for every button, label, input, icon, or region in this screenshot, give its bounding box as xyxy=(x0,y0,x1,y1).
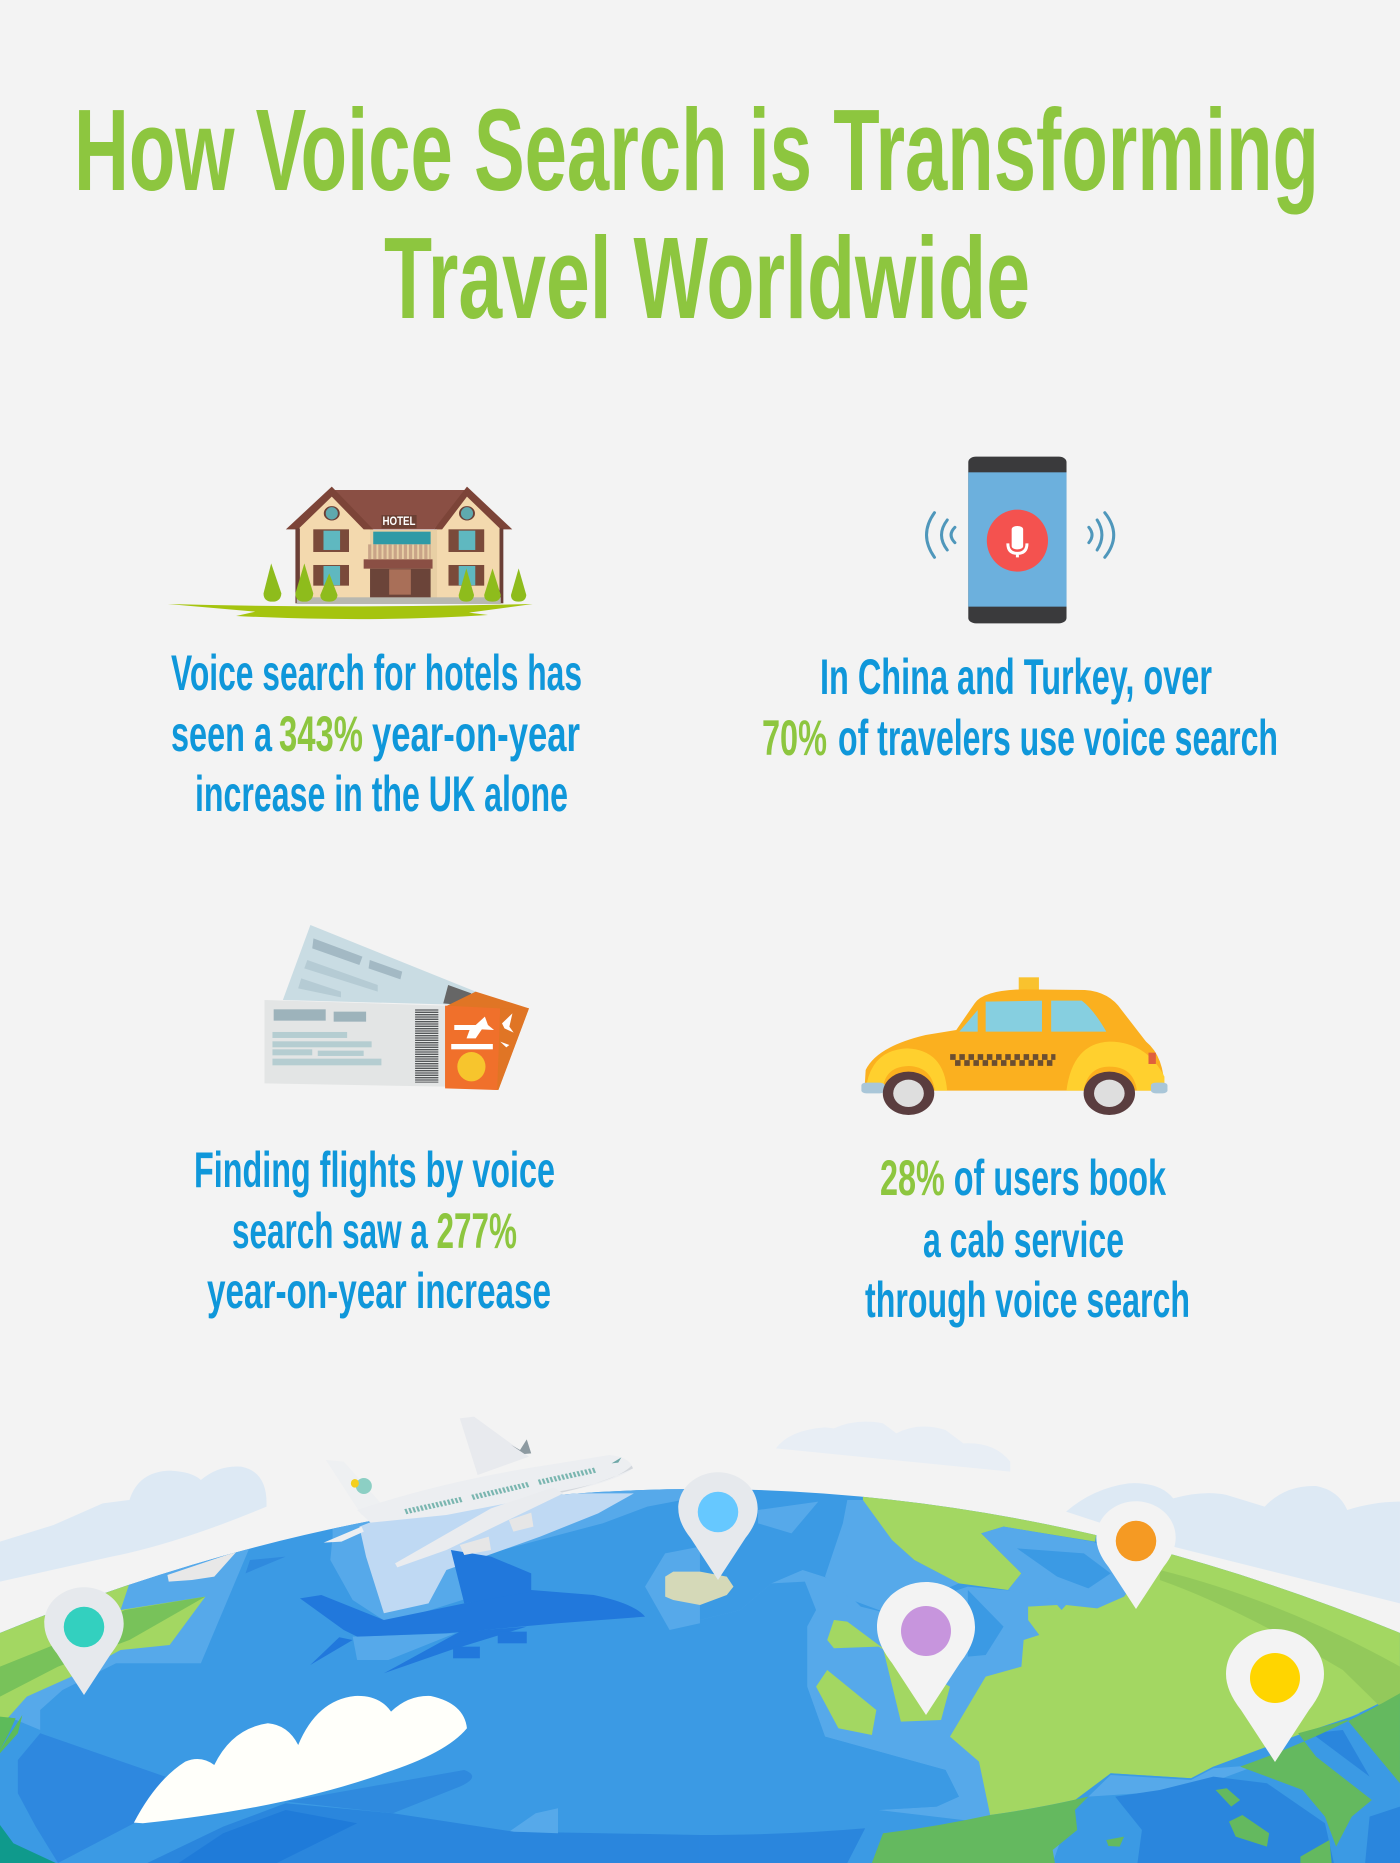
text block: flights stat: year-on-year increase xyxy=(207,1263,551,1319)
map pin: yellow xyxy=(1226,1629,1324,1762)
text block: flights stat: Finding flights by voice xyxy=(194,1142,555,1198)
left part of the globe xyxy=(0,1467,700,1863)
map pin: purple xyxy=(877,1582,975,1715)
title xyxy=(74,85,1319,343)
airplane xyxy=(324,1417,633,1567)
map pin: light blue xyxy=(678,1472,758,1580)
background clouds xyxy=(0,1422,1400,1603)
icon: boarding passes xyxy=(264,925,529,1090)
text block: hotels stat: Voice search for hotels has xyxy=(171,645,582,701)
text block: China and Turkey stat xyxy=(762,649,1278,766)
text block: cab stat xyxy=(865,1150,1190,1328)
text block: hotels stat: seen a xyxy=(171,706,273,762)
text block: China and Turkey stat: 70% xyxy=(762,710,827,766)
icon: hotel: HOTEL xyxy=(382,514,416,528)
text block: cab stat: 28% of users book xyxy=(880,1150,1166,1206)
globe xyxy=(0,1467,1400,1863)
icon: phone with microphone xyxy=(927,457,1114,623)
title: Travel Worldwide xyxy=(384,213,1030,343)
right part of the globe xyxy=(665,1493,1400,1863)
map pin: orange xyxy=(1096,1501,1176,1609)
text block: cab stat: a cab service xyxy=(923,1212,1124,1268)
lower right sea xyxy=(1053,1700,1400,1863)
icon: taxi xyxy=(861,977,1167,1115)
text block: hotels stat xyxy=(171,645,582,822)
white cloud xyxy=(134,1696,467,1823)
text block: cab stat: through voice search xyxy=(865,1272,1190,1328)
icon: hotel xyxy=(168,487,533,619)
text block: hotels stat: 343% xyxy=(279,706,363,762)
text block: flights stat: search saw a 277% xyxy=(232,1203,517,1259)
text block: flights stat xyxy=(194,1142,555,1319)
map pin: teal xyxy=(44,1587,124,1695)
text block: hotels stat: year-on-year xyxy=(372,706,580,762)
island xyxy=(665,1572,733,1605)
text block: hotels stat: increase in the UK alone xyxy=(195,766,568,822)
plane shadow xyxy=(300,1550,645,1673)
